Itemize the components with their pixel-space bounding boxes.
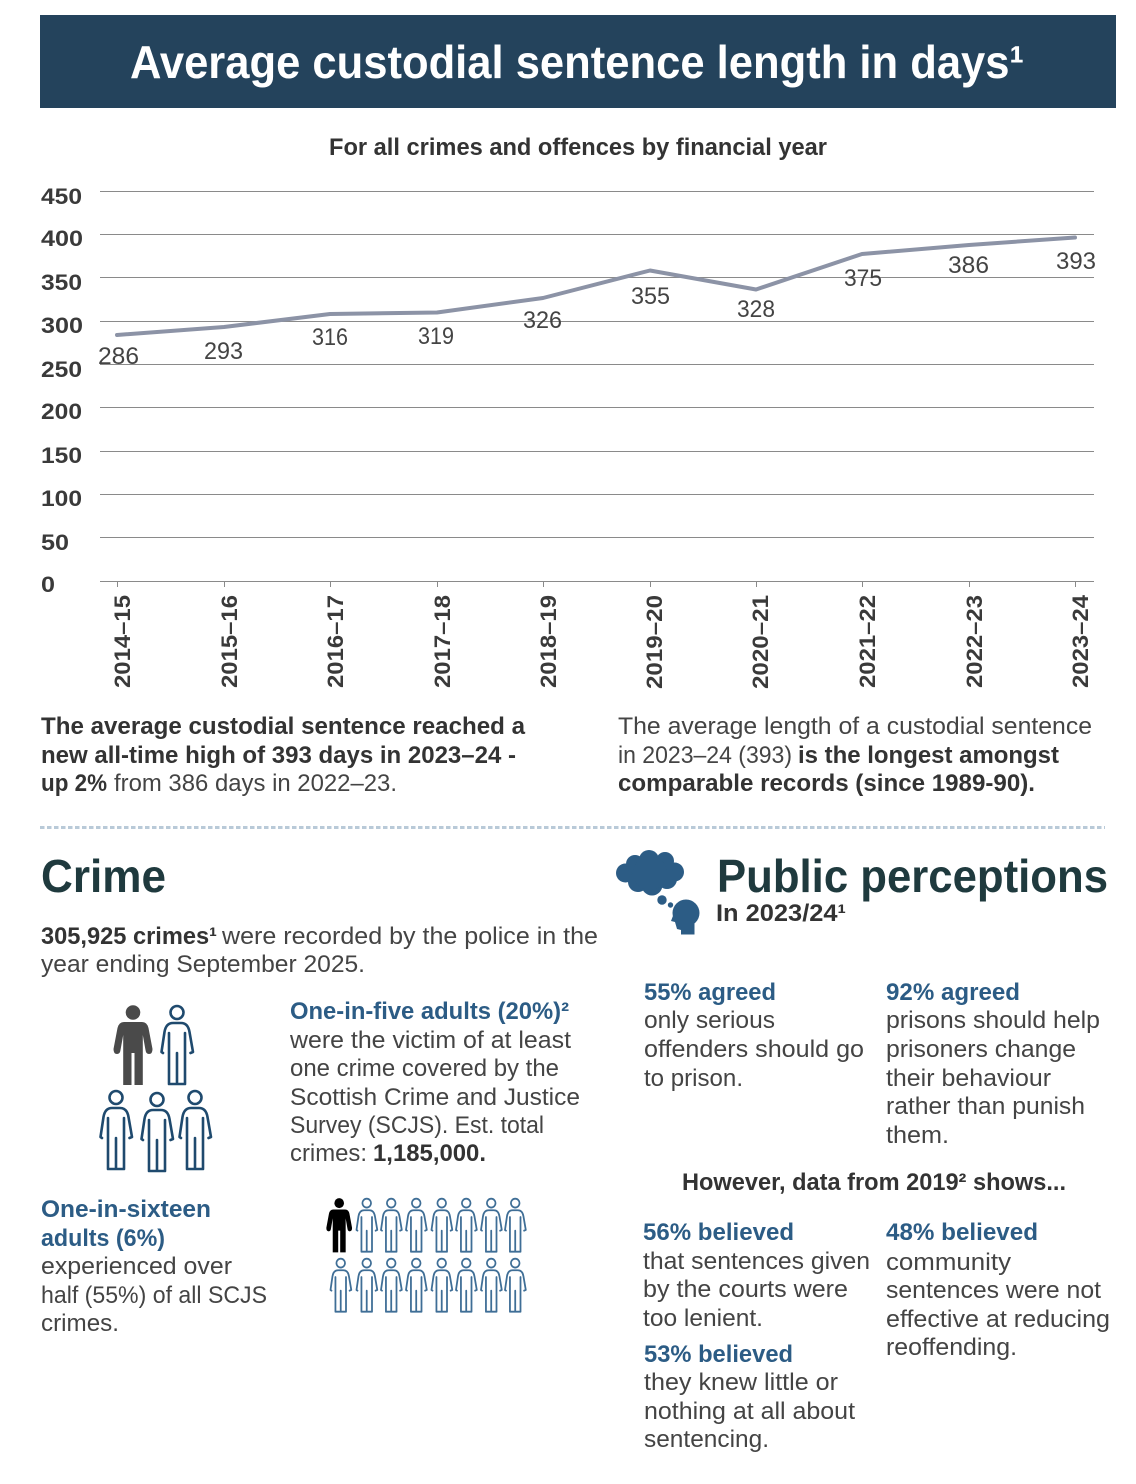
stat: 48% believed xyxy=(886,1219,1110,1361)
y axis labels: 200 xyxy=(41,399,82,424)
data labels: 319 xyxy=(418,323,454,350)
text block: one in sixteen adults: adults (6%) xyxy=(41,1225,165,1252)
data labels: 375 xyxy=(844,265,882,292)
heading: Public perceptions xyxy=(716,850,1108,927)
x axis labels: 2022–23 xyxy=(962,595,987,688)
stat: 92% agreed: prisons should help xyxy=(886,1007,1100,1034)
stat: 56% believed: 56% believed xyxy=(643,1219,794,1246)
text block: one in five adults: 1,185,000. xyxy=(373,1140,486,1167)
data line xyxy=(117,238,1075,335)
text block: one in five adults: Survey (SCJS). Est. total xyxy=(290,1112,544,1139)
x axis labels: 2020–21 xyxy=(748,595,773,689)
x axis labels: 2014–15 xyxy=(110,595,135,688)
x axis labels: 2023–24 xyxy=(1068,594,1093,688)
icon: one in sixteen people xyxy=(326,1198,526,1312)
stat: 55% agreed: 55% agreed xyxy=(644,979,776,1006)
stat: 92% agreed: 92% agreed xyxy=(886,979,1020,1006)
data labels: 393 xyxy=(1056,248,1096,275)
stat: 53% believed xyxy=(644,1341,855,1453)
heading: Public perceptions: In 2023/24¹ xyxy=(716,900,846,927)
y axis labels: 400 xyxy=(41,226,83,251)
y axis labels: 250 xyxy=(41,357,82,382)
y axis labels: 350 xyxy=(41,270,82,295)
stat: 56% believed xyxy=(643,1219,870,1332)
stat: 55% agreed: only serious xyxy=(644,1007,775,1034)
y axis labels: 50 xyxy=(41,530,69,555)
heading: Crime: Crime xyxy=(41,850,166,902)
stat: 48% believed: community xyxy=(886,1249,1011,1276)
text block: all-time high: up 2% xyxy=(41,770,107,797)
stat: 48% believed: effective at reducing xyxy=(886,1306,1110,1333)
data labels: 355 xyxy=(631,283,670,310)
stat: 53% believed: nothing at all about xyxy=(644,1398,855,1425)
stat: 53% believed: 53% believed xyxy=(644,1341,793,1368)
icon: one in five people xyxy=(100,1005,211,1171)
chart subtitle: For all crimes and offences by financial year xyxy=(329,134,827,161)
heading: Public perceptions: Public perceptions xyxy=(717,850,1108,902)
text block: one in sixteen adults xyxy=(41,1196,267,1337)
stat: 53% believed: sentencing. xyxy=(644,1426,769,1453)
y axis labels: 300 xyxy=(41,313,83,338)
stat: 55% agreed: offenders should go xyxy=(644,1036,864,1063)
text block: crimes recorded: year ending September 2025. xyxy=(41,951,365,978)
stat: 48% believed: 48% believed xyxy=(886,1219,1038,1246)
x axis labels xyxy=(110,594,1093,689)
data labels: 293 xyxy=(204,338,243,365)
text block: one in five adults: Scottish Crime and Justice xyxy=(290,1084,580,1111)
data labels: 286 xyxy=(98,343,139,370)
x axis labels: 2016–17 xyxy=(323,595,348,688)
stat: 92% agreed: them. xyxy=(886,1122,949,1149)
text block: one in sixteen adults: experienced over xyxy=(41,1253,232,1280)
text block: one in five adults: crimes: xyxy=(290,1140,367,1167)
text block: one in five adults: were the victim of at least xyxy=(289,1027,571,1054)
stat: 92% agreed: rather than punish xyxy=(886,1093,1085,1120)
x axis labels: 2017–18 xyxy=(430,595,455,688)
text block: one in sixteen adults: half (55%) of all SCJS xyxy=(41,1282,267,1309)
data labels xyxy=(98,248,1096,370)
text block: all-time high: The average custodial sentence reached a xyxy=(41,713,526,740)
y axis labels: 150 xyxy=(41,443,82,468)
y axis labels: 100 xyxy=(41,486,82,511)
y axis labels xyxy=(41,184,83,597)
line chart: average sentence length xyxy=(41,184,1096,689)
text block: longest on record: in 2023–24 (393) xyxy=(618,742,792,769)
stat: 92% agreed: their behaviour xyxy=(886,1065,1051,1092)
data labels: 328 xyxy=(737,296,775,323)
subheading: data from 2019: However, data from 2019² shows... xyxy=(682,1169,1066,1196)
title banner: Average custodial sentence length in days¹ xyxy=(130,36,1024,88)
title banner xyxy=(40,15,1116,108)
text block: crimes recorded xyxy=(41,923,598,978)
stat: 56% believed: by the courts were xyxy=(643,1276,848,1303)
text block: one in sixteen adults: One-in-sixteen xyxy=(41,1196,211,1223)
stat: 53% believed: they knew little or xyxy=(644,1369,838,1396)
y axis labels: 450 xyxy=(41,184,82,209)
text block: crimes recorded: were recorded by the police in the xyxy=(221,923,598,950)
text block: longest on record xyxy=(618,713,1092,797)
text block: all-time high: new all-time high of 393 days in 2023–24 - xyxy=(41,742,516,769)
y axis labels: 0 xyxy=(41,572,55,597)
stat: 48% believed: reoffending. xyxy=(886,1334,1017,1361)
stat: 56% believed: too lenient. xyxy=(643,1305,763,1332)
text block: crimes recorded: 305,925 crimes¹ xyxy=(41,923,217,950)
stat: 92% agreed: prisoners change xyxy=(886,1036,1076,1063)
x axis labels: 2018–19 xyxy=(536,595,561,688)
data labels: 386 xyxy=(948,252,989,279)
data labels: 326 xyxy=(523,307,562,334)
text block: all-time high xyxy=(41,713,526,797)
stat: 56% believed: that sentences given xyxy=(643,1248,870,1275)
data labels: 316 xyxy=(312,324,348,351)
stat: 92% agreed xyxy=(886,979,1100,1149)
x axis labels: 2021–22 xyxy=(855,595,880,688)
text block: longest on record: The average length of a custodial sentence xyxy=(618,713,1092,740)
text block: longest on record: comparable records (since 1989-90). xyxy=(618,770,1035,797)
text block: one in five adults: one crime covered by the xyxy=(290,1055,559,1082)
x axis labels: 2015–16 xyxy=(217,595,242,688)
text block: one in five adults xyxy=(289,998,580,1167)
stat: 55% agreed xyxy=(644,979,864,1092)
text block: one in sixteen adults: crimes. xyxy=(41,1310,119,1337)
stat: 48% believed: sentences were not xyxy=(886,1277,1101,1304)
icon: thought bubble and head xyxy=(616,850,700,934)
text block: all-time high: from 386 days in 2022–23. xyxy=(114,770,397,797)
x axis labels: 2019–20 xyxy=(642,595,667,689)
text block: one in five adults: One-in-five adults (20%)² xyxy=(290,998,569,1025)
stat: 55% agreed: to prison. xyxy=(644,1065,743,1092)
text block: longest on record: is the longest amongst xyxy=(798,742,1059,769)
